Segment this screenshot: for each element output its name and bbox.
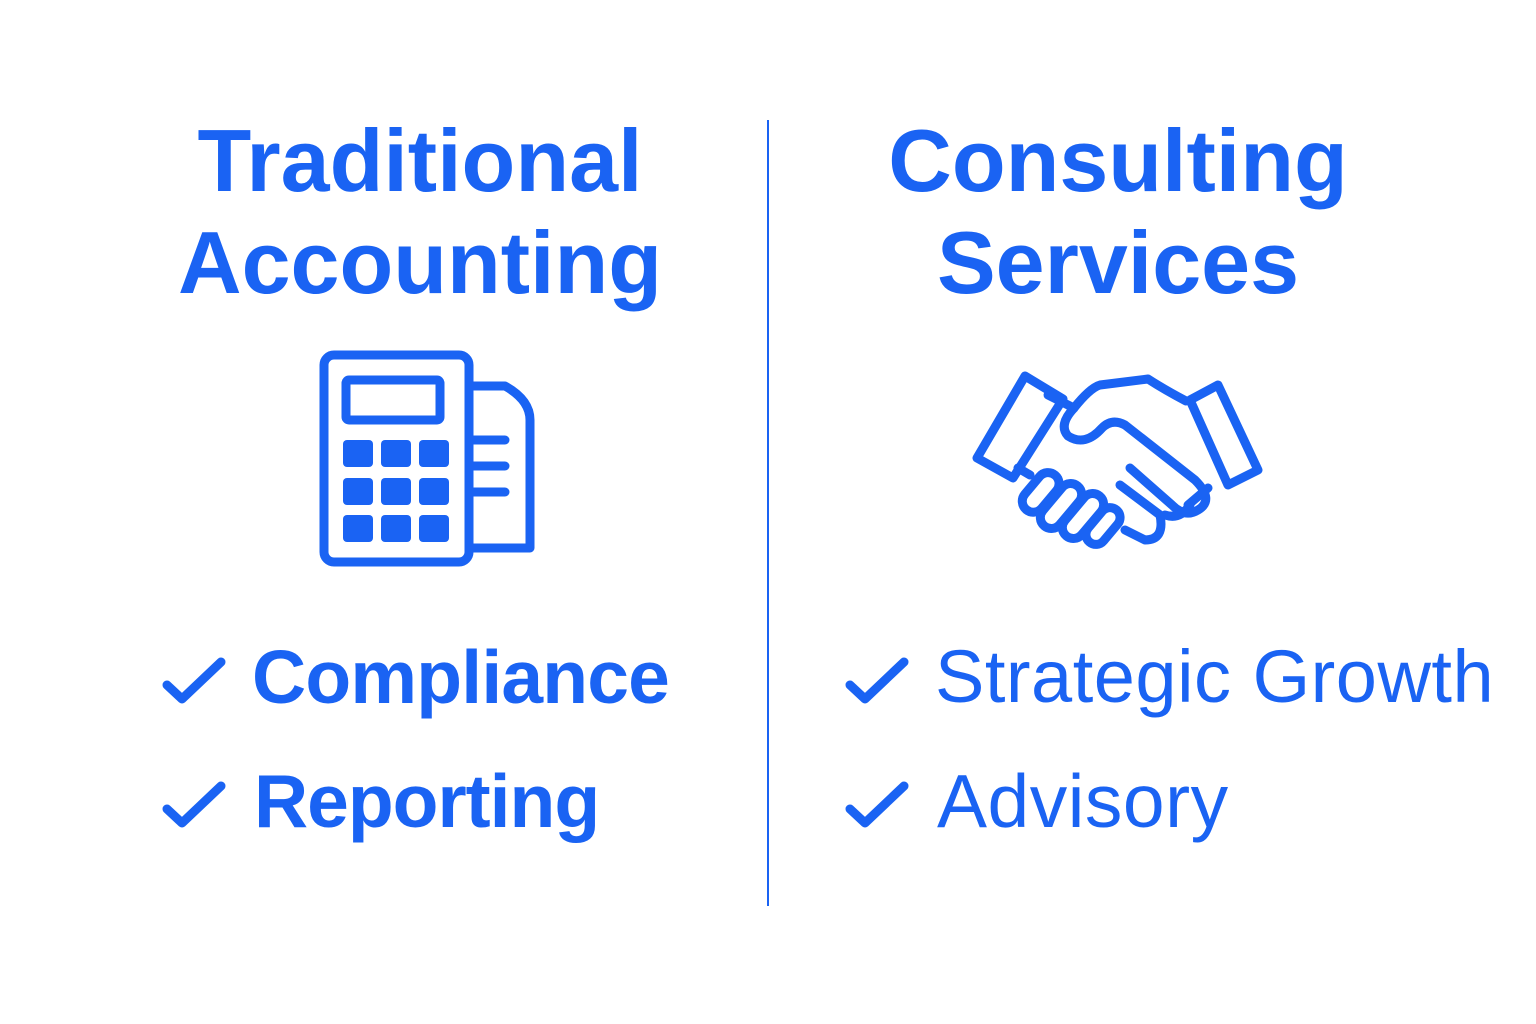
title: Traditional Accounting	[178, 111, 662, 312]
item: Reporting: Reporting	[254, 759, 599, 843]
title: Traditional Accounting: Accounting	[178, 213, 662, 312]
item: Advisory: Advisory	[937, 759, 1229, 843]
title: Consulting Services: Services	[937, 213, 1299, 312]
item: Compliance: Compliance	[252, 635, 669, 719]
list: consulting	[846, 635, 1494, 843]
item: Strategic Growth: Strategic Growth	[935, 635, 1494, 718]
title: Consulting Services	[888, 111, 1348, 312]
divider	[767, 120, 769, 906]
list: traditional	[162, 635, 669, 843]
title: Traditional Accounting: Traditional	[198, 111, 642, 210]
title: Consulting Services: Consulting	[888, 111, 1348, 210]
